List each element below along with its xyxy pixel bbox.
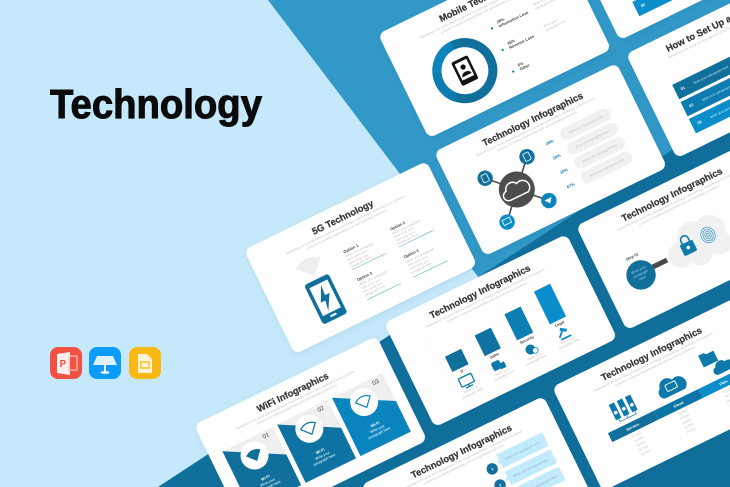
option 1: here write your xyxy=(348,252,370,266)
icon: Keynote xyxy=(89,347,121,379)
wifi card 03: Wi-Fi xyxy=(370,421,380,428)
bar captions: Write your xyxy=(527,351,543,361)
numbered callouts: Write your paragraph here xyxy=(504,441,541,461)
option 3: Write your paragraph xyxy=(359,269,388,287)
icon: signal fan xyxy=(293,253,327,282)
bar chart: Sales xyxy=(489,352,500,360)
text block: process of creating relationships with and satisfying customers. xyxy=(446,281,528,323)
option 3 xyxy=(356,261,401,300)
option 4: here write your xyxy=(407,254,429,268)
wifi card 02: 02 xyxy=(317,405,326,414)
panel: cloud hub xyxy=(434,63,667,256)
text block: Marketing is the study and management of exchange relationships. Marketing is the business xyxy=(475,96,596,158)
text block: Marketing is the study and management of exchange relationships. Marketing is the business xyxy=(285,194,406,256)
legend: Other xyxy=(519,62,531,72)
option 2 xyxy=(389,210,433,247)
percent pills: 10% xyxy=(559,167,569,175)
step circle: here xyxy=(639,275,647,281)
panel: 5G technology xyxy=(244,161,477,354)
bar captions xyxy=(459,333,581,400)
option 2: Write your paragraph xyxy=(392,218,421,236)
bar chart: Legal xyxy=(554,320,565,328)
text block: process of creating relationships with and satisfying customers. xyxy=(614,345,696,387)
panel: mobile technology xyxy=(378,0,611,138)
text block: process of creating relationships with and satisfying customers. xyxy=(638,184,720,226)
icon: server xyxy=(490,358,507,372)
option 3: here write your xyxy=(362,280,384,294)
icon: monitor xyxy=(458,373,476,390)
app icons xyxy=(50,347,161,379)
text block: Marketing is the study and management of exchange relationships. Marketing is the business xyxy=(593,331,714,393)
wifi card 01: Wi-Fi xyxy=(260,474,271,482)
bar captions: paragraph here xyxy=(493,369,515,382)
table: 24,500 xyxy=(638,444,649,452)
option 2: here write your xyxy=(395,229,417,243)
wifi card 02: paragraph here xyxy=(313,453,336,467)
option 2: Option 2 xyxy=(389,220,407,232)
option 1: paragraph here xyxy=(350,255,372,269)
percent pills xyxy=(543,106,634,193)
option 3: Option 3 xyxy=(356,270,373,282)
option 1: Write your paragraph xyxy=(345,241,374,258)
step bars: Write your paragraph here xyxy=(693,65,729,85)
percent pills: 67% xyxy=(566,181,576,190)
heading: 5G Technology xyxy=(310,197,376,237)
bar captions: Write your xyxy=(495,367,511,377)
heading: WiFi Infographics xyxy=(255,370,330,414)
step circle: Write your xyxy=(631,264,647,275)
axis dots xyxy=(427,340,444,376)
text block: process of creating relationships with and satisfying customers. xyxy=(256,383,338,425)
icon: phone xyxy=(451,55,479,86)
table: 24,500 xyxy=(681,417,692,425)
table: 24,500 xyxy=(640,449,651,457)
icon: folder xyxy=(698,349,718,367)
step bars: 03 xyxy=(697,120,702,125)
panel: servers table xyxy=(552,298,730,487)
option 1: Option 1 xyxy=(342,242,360,254)
heading: Technology Infographics xyxy=(428,262,532,321)
option 3: paragraph here xyxy=(364,284,386,297)
step bar 03 xyxy=(632,0,730,16)
step bars: 02 xyxy=(688,103,694,108)
legend: paragraph here xyxy=(545,19,567,33)
panel: security steps xyxy=(576,137,730,330)
option 2: paragraph here xyxy=(397,232,419,246)
option 1 xyxy=(342,233,386,270)
text block: Marketing is the study and management of exchange relationships. Marketing is the business xyxy=(235,369,356,431)
icon: phone with bolt xyxy=(304,273,348,325)
table: Files xyxy=(719,379,728,387)
bar chart xyxy=(436,284,569,377)
step circle: paragraph xyxy=(633,269,649,279)
option 4: paragraph here xyxy=(411,261,433,275)
bar chart: IT xyxy=(460,369,465,374)
bar captions: paragraph here xyxy=(526,353,548,367)
legend: Information Loss xyxy=(498,9,530,28)
step bars xyxy=(672,19,730,133)
wifi card 01: 01 xyxy=(262,432,271,441)
icon: lock xyxy=(676,233,697,256)
table: 24,500 xyxy=(677,408,688,416)
heading: Technology Infographics xyxy=(409,422,513,480)
bar captions: paragraph here xyxy=(462,386,484,400)
table: Servers xyxy=(626,422,640,432)
numbered callouts: 1 xyxy=(491,467,494,472)
table: 24,500 xyxy=(684,422,694,430)
bar captions: Write your xyxy=(463,384,479,395)
numbered callouts xyxy=(482,432,565,487)
text block: Marketing is the study and management of exchange relationships. Marketing is the business xyxy=(425,267,546,329)
connector xyxy=(651,258,668,270)
option 2: here write your xyxy=(393,226,415,239)
icon: cloud xyxy=(654,371,689,400)
percent pills: 28% xyxy=(545,138,555,146)
wifi card 02: Wi-Fi xyxy=(315,447,325,455)
percent pills: Write your paragraph here xyxy=(568,114,604,135)
donut chart xyxy=(427,33,502,108)
bar captions: Write your xyxy=(560,335,576,345)
legend: 5% xyxy=(517,60,525,68)
icon: Google Slides xyxy=(129,347,161,379)
legend: Write your xyxy=(543,18,559,28)
bar captions: paragraph here xyxy=(558,337,581,351)
step bar 03: 03 xyxy=(640,3,646,8)
option 4: Option 4 xyxy=(403,247,420,259)
icon: security xyxy=(524,342,539,357)
panel: how to set up xyxy=(626,0,730,158)
percent pills: Write your paragraph here xyxy=(582,143,618,164)
option 3: here write your xyxy=(360,277,383,290)
table: 24,500 xyxy=(635,440,646,448)
icon: small cloud xyxy=(710,355,730,376)
icon: gavel xyxy=(555,325,572,341)
wifi card 01 xyxy=(222,427,301,487)
option 4: here write your xyxy=(409,258,431,271)
option 1: here write your xyxy=(347,248,369,262)
title: Technology xyxy=(50,81,262,127)
step bars: 01 xyxy=(680,86,686,91)
heading: Technology Infographics xyxy=(620,165,724,224)
table xyxy=(608,367,730,466)
step circle xyxy=(618,249,661,295)
heading: Technology Infographics xyxy=(480,90,585,148)
legend xyxy=(488,0,577,75)
percent pills: 20% xyxy=(552,152,562,161)
wifi card 03: Write your xyxy=(369,423,386,434)
icon: servers xyxy=(609,394,639,423)
panel: WiFi infographics xyxy=(194,336,427,487)
text block: process of creating relationships with and satisfying customers. xyxy=(496,110,578,152)
panel: top right slide xyxy=(569,0,730,40)
text block: process of creating relationships with and satisfying customers. xyxy=(306,208,388,250)
wifi card 02 xyxy=(277,400,356,483)
wifi card 03: 03 xyxy=(372,379,381,387)
text block: process of creating relationships with and satisfying customers. xyxy=(423,443,505,485)
legend: 45% xyxy=(506,38,516,46)
percent pills: Write your paragraph here xyxy=(575,129,611,149)
cloud shape xyxy=(658,208,730,278)
wifi card 03 xyxy=(332,373,411,456)
percent pills: Write your paragraph here xyxy=(589,158,625,178)
bar chart: Security xyxy=(519,335,535,345)
icon: fingerprint xyxy=(698,225,718,245)
option 4 xyxy=(403,238,448,277)
wifi card 03: paragraph here xyxy=(368,426,391,440)
table: 24,500 xyxy=(679,413,690,421)
panel: list callouts xyxy=(361,396,594,487)
legend: 28% xyxy=(496,16,506,24)
hub diagram xyxy=(474,146,560,233)
panel: bar chart xyxy=(384,234,617,427)
step circle: Step 01 xyxy=(625,252,639,262)
table: 24,500 xyxy=(686,426,697,434)
wifi card 02: Write your xyxy=(314,450,331,461)
table: 24,500 xyxy=(633,435,644,443)
numbered callouts: Write your paragraph here xyxy=(513,458,549,478)
legend: Revenue Loss xyxy=(508,33,536,50)
table: Cloud xyxy=(673,400,685,409)
option 4: Write your paragraph xyxy=(405,247,435,264)
icon: PowerPoint: P xyxy=(60,359,66,370)
table: 24,500 xyxy=(631,431,642,439)
heading: Technology Infographics xyxy=(599,324,704,383)
